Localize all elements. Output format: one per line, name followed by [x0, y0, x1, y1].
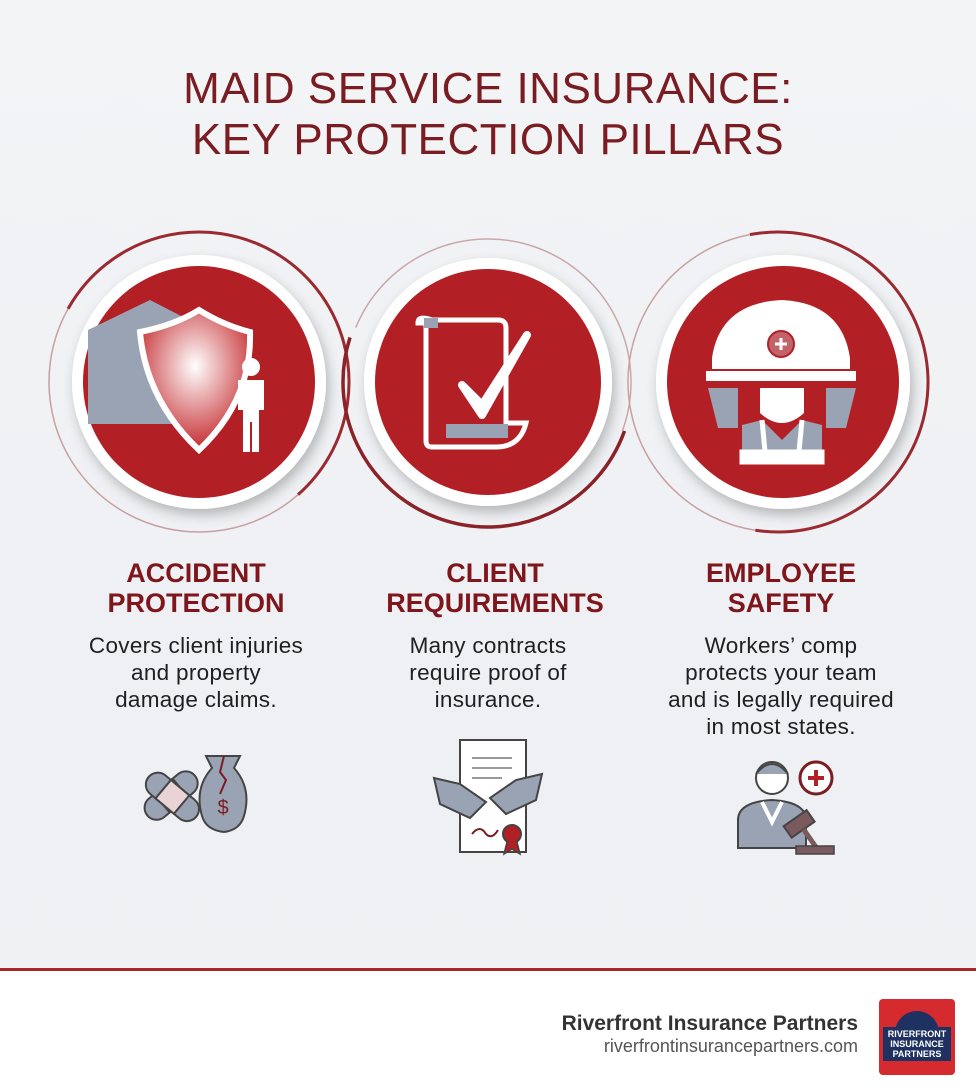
heading: client requirements: [386, 558, 604, 618]
heading: client requirements: REQUIREMENTS: [386, 588, 604, 618]
heading: employee safety: EMPLOYEE: [706, 558, 856, 588]
text: employee safety: protects your team: [685, 660, 877, 685]
heading: client requirements: CLIENT: [446, 558, 544, 588]
text: employee safety: [668, 633, 894, 739]
footer: logo: RIVERFRONT: [888, 1029, 946, 1039]
text: client requirements: Many contracts: [410, 633, 566, 658]
heading: employee safety: SAFETY: [728, 588, 834, 618]
footer: logo: [879, 999, 955, 1075]
text: client requirements: insurance.: [435, 687, 541, 712]
title: [183, 64, 793, 164]
heading: accident protection: PROTECTION: [107, 588, 284, 618]
footer: logo: INSURANCE: [890, 1039, 944, 1049]
title: MAID SERVICE INSURANCE:: [183, 64, 793, 113]
text: employee safety: and is legally required: [668, 687, 894, 712]
footer: website: riverfrontinsurancepartners.com: [604, 1036, 858, 1056]
icon: bandage and broken vase: $: [217, 797, 229, 819]
text: accident protection: Covers client injuries: [89, 633, 303, 658]
text: accident protection: and property: [131, 660, 261, 685]
icon: contract handshake: [432, 739, 544, 856]
footer: company name: Riverfront Insurance Partners: [562, 1012, 858, 1035]
footer: [0, 968, 976, 1091]
footer: logo: PARTNERS: [893, 1049, 941, 1059]
circle: employee safety: [604, 208, 952, 556]
heading: accident protection: ACCIDENT: [126, 558, 266, 588]
icon: bandage and broken vase: [144, 755, 248, 833]
text: employee safety: in most states.: [706, 714, 856, 739]
heading: accident protection: [107, 558, 284, 618]
text: client requirements: [409, 633, 567, 712]
icon: worker with gavel: [737, 760, 835, 855]
heading: employee safety: [706, 558, 856, 618]
circle: accident protection: [0, 177, 404, 587]
circle: client requirements: [302, 196, 674, 568]
text: accident protection: damage claims.: [115, 687, 277, 712]
text: client requirements: require proof of: [409, 660, 567, 685]
title: KEY PROTECTION PILLARS: [192, 115, 784, 164]
text: accident protection: [89, 633, 303, 712]
text: employee safety: Workers’ comp: [705, 633, 857, 658]
pillar circles: [48, 230, 930, 534]
